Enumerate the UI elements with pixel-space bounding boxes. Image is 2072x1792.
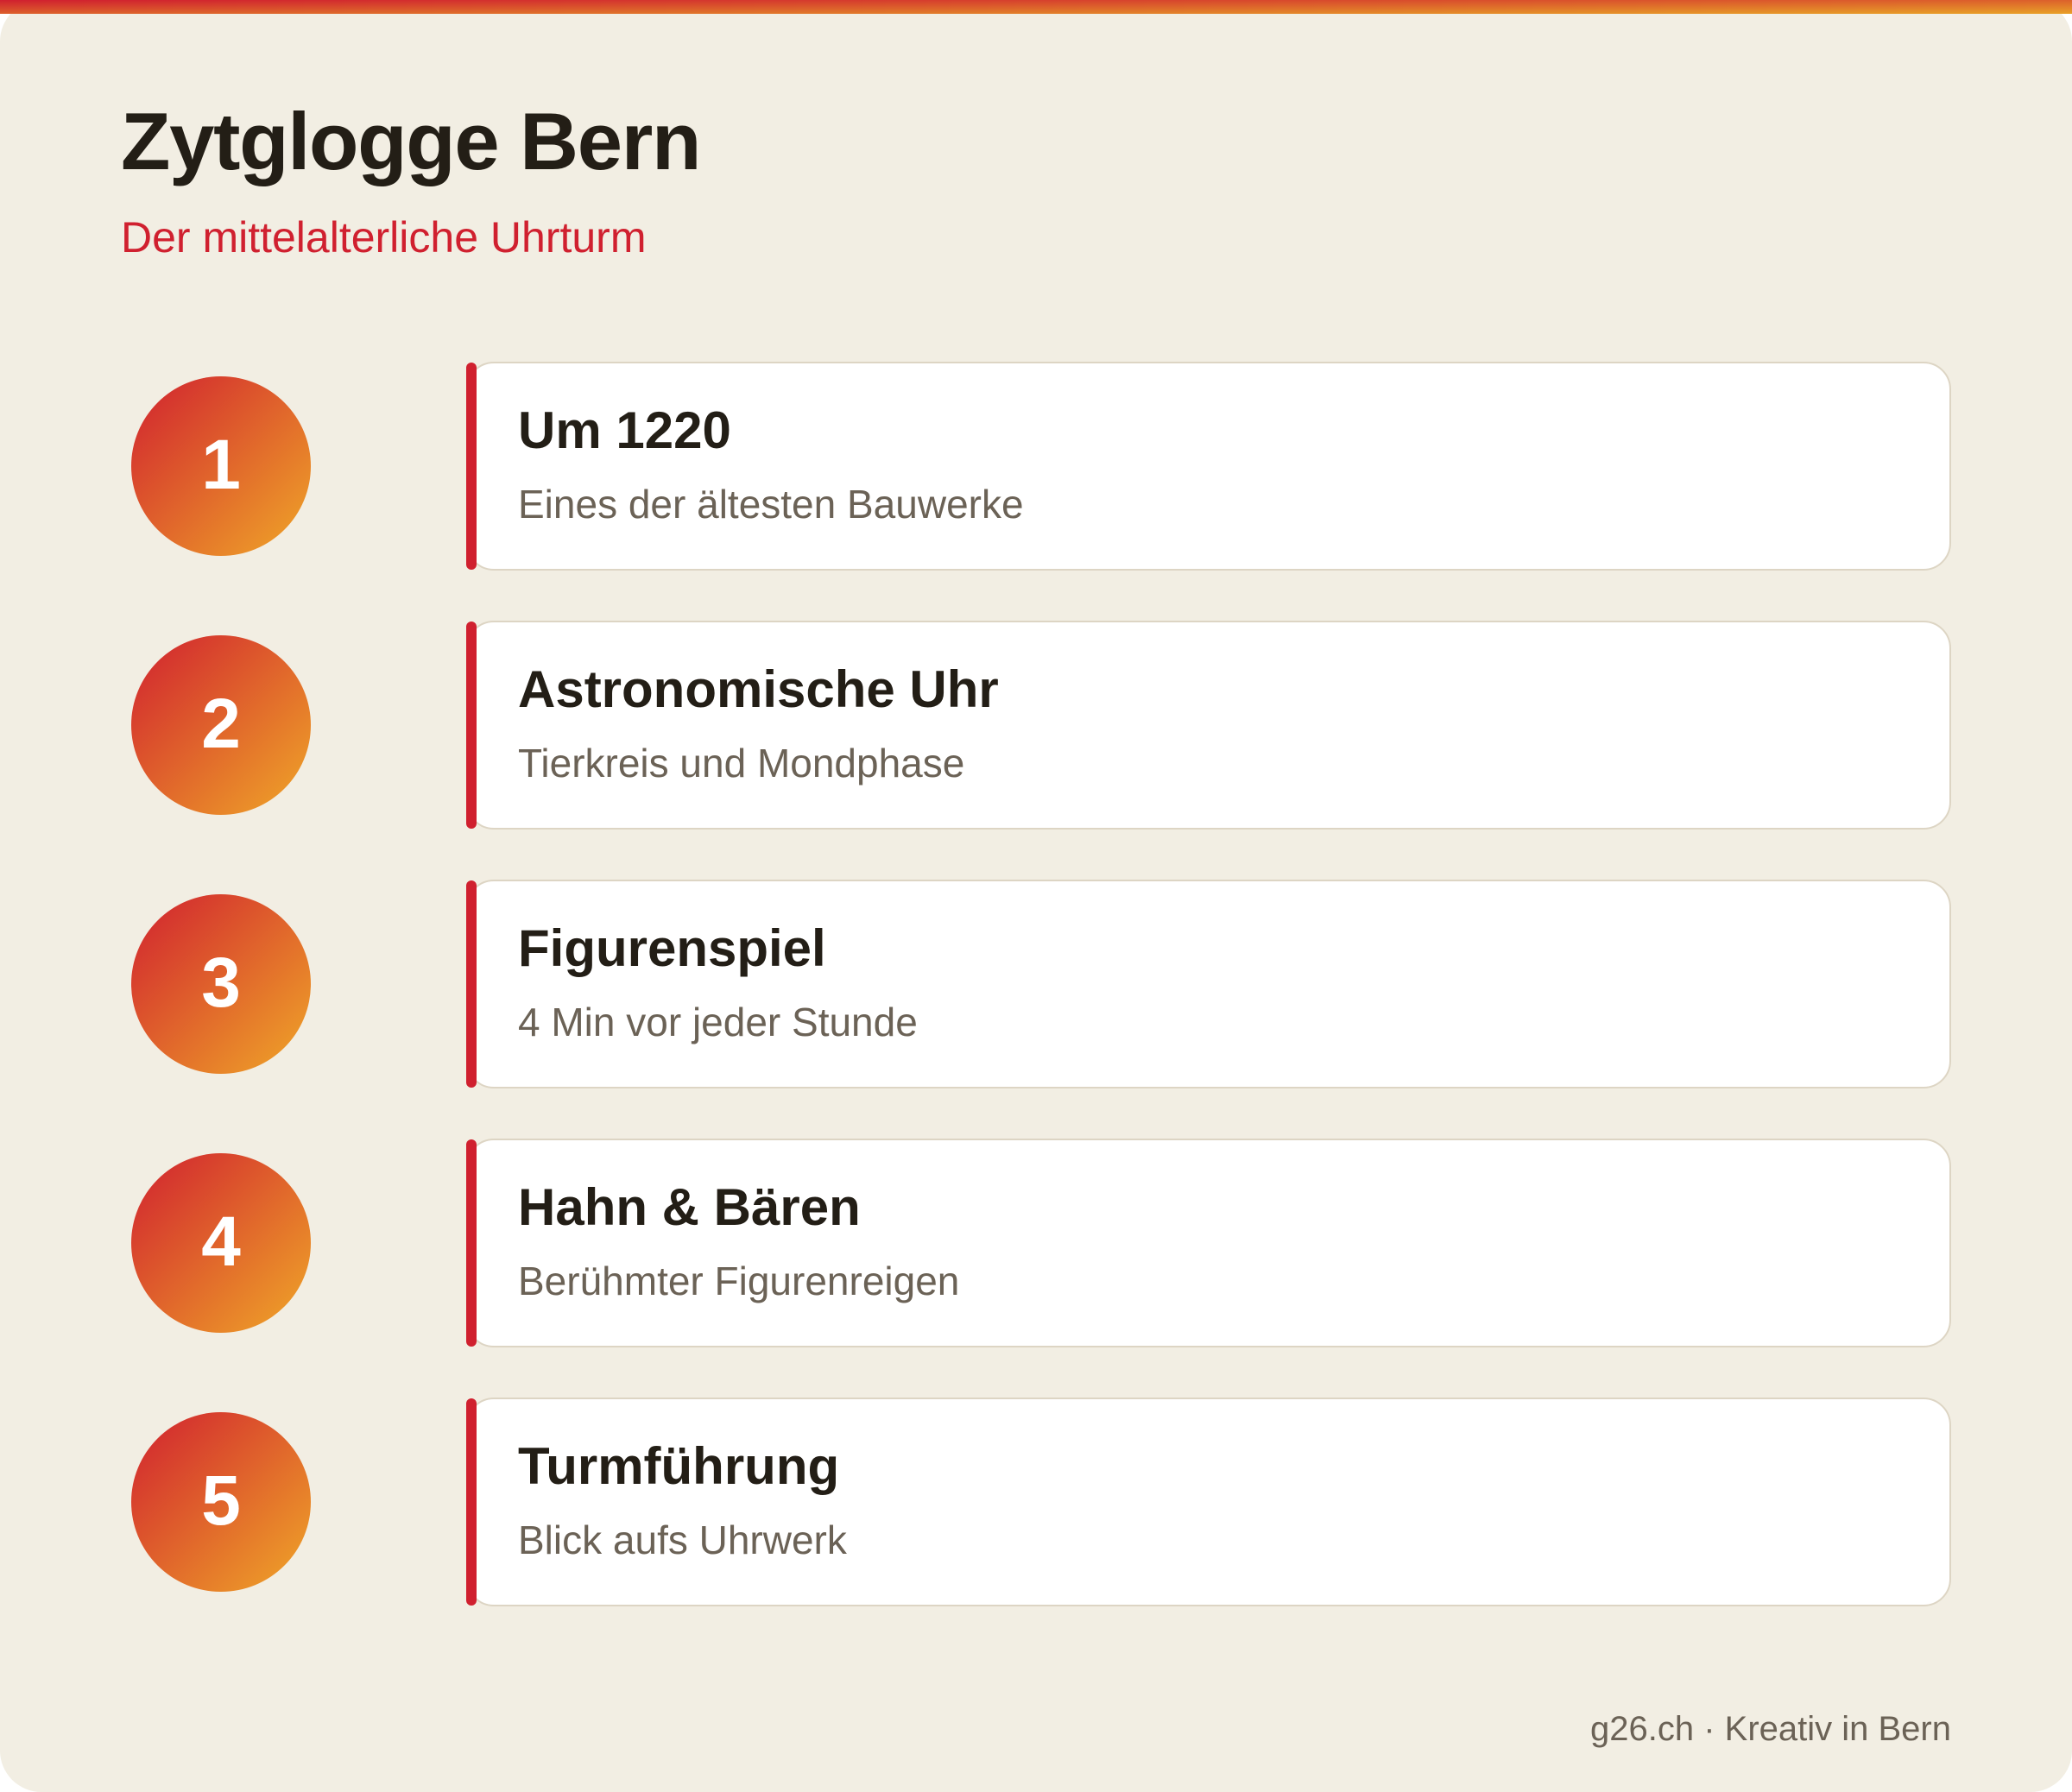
footer: g26.ch · Kreativ in Bern	[1590, 1710, 1951, 1748]
title: Zytglogge Bern	[121, 96, 700, 186]
card accent 3	[466, 880, 477, 1088]
number badge 2	[131, 635, 311, 815]
card heading 5: Turmführung	[518, 1437, 839, 1495]
number badge 5: 5	[201, 1461, 241, 1540]
subtitle: Der mittelalterliche Uhrturm	[121, 213, 646, 262]
card heading 1: Um 1220	[518, 401, 731, 459]
card heading 2: Astronomische Uhr	[518, 660, 999, 718]
number badge 2: 2	[201, 685, 241, 763]
step 1	[131, 362, 1951, 571]
number badge 3: 3	[201, 943, 241, 1022]
card text 3: 4 Min vor jeder Stunde	[518, 1000, 918, 1044]
number badge 4	[131, 1153, 311, 1333]
card text 2: Tierkreis und Mondphase	[518, 741, 964, 786]
card text 5: Blick aufs Uhrwerk	[518, 1518, 847, 1562]
card text 1: Eines der ältesten Bauwerke	[518, 482, 1024, 527]
card heading 4: Hahn & Bären	[518, 1178, 861, 1236]
card 5	[466, 1398, 1951, 1606]
number badge 1: 1	[201, 426, 241, 504]
step 3	[131, 880, 1951, 1088]
top gradient bar	[0, 0, 2072, 14]
step 2	[131, 621, 1951, 830]
number badge 3	[131, 894, 311, 1074]
number badge 4: 4	[201, 1202, 241, 1281]
number badge 5	[131, 1412, 311, 1592]
card heading 3: Figurenspiel	[518, 919, 826, 977]
card accent 1	[466, 363, 477, 570]
card accent 5	[466, 1398, 477, 1606]
number badge 1	[131, 376, 311, 556]
step 4	[131, 1139, 1951, 1347]
card 4	[466, 1139, 1951, 1347]
card 3	[466, 880, 1951, 1088]
card accent 4	[466, 1139, 477, 1347]
step 5	[131, 1398, 1951, 1606]
card 1	[466, 362, 1951, 571]
card text 4: Berühmter Figurenreigen	[518, 1259, 959, 1303]
card 2	[466, 621, 1951, 830]
card accent 2	[466, 622, 477, 829]
